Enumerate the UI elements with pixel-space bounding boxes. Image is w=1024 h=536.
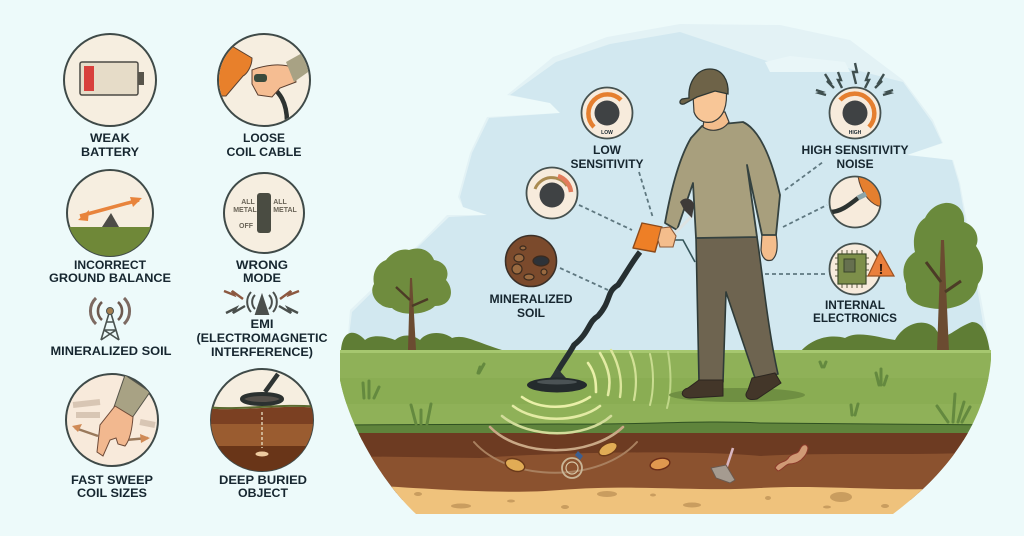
buried objects xyxy=(504,439,808,483)
tree: left xyxy=(341,248,502,350)
ground xyxy=(330,350,1000,520)
callout: internal electronics: ! xyxy=(878,261,884,278)
icon: weak battery: BATTERY xyxy=(81,145,139,159)
icon: wrong mode: WRONG xyxy=(236,258,288,272)
icon: deep buried object: DEEP BURIED xyxy=(219,473,307,487)
icon: tower xyxy=(90,298,130,340)
label: EMI: EMI xyxy=(250,317,274,331)
icon: wrong mode: MODE xyxy=(243,271,281,285)
callout: mineralized soil: MINERALIZED xyxy=(490,292,573,306)
hand on grip xyxy=(658,227,676,247)
icon: ground balance xyxy=(49,170,171,285)
icon: EMI xyxy=(224,291,299,314)
callout: low sensitivity: SENSITIVITY xyxy=(570,157,644,171)
icon: wrong mode: METAL xyxy=(273,207,298,214)
callout: high sensitivity noise: HIGH SENSITIVITY xyxy=(802,143,908,157)
icon: weak battery xyxy=(64,34,156,159)
callout: mineralized soil: SOIL xyxy=(517,306,545,320)
icon: fast sweep: COIL SIZES xyxy=(77,486,147,500)
sky xyxy=(340,24,991,353)
callout: high sensitivity noise: HIGH xyxy=(849,130,862,136)
icon: deep buried object: OBJECT xyxy=(238,486,289,500)
icon: wrong mode: METAL xyxy=(233,207,258,214)
icon: fast sweep: FAST SWEEP xyxy=(71,473,153,487)
coin xyxy=(597,439,619,459)
tree: right xyxy=(800,203,990,352)
callout: internal electronics xyxy=(813,244,897,325)
callout: low sensitivity: LOW xyxy=(593,143,622,157)
shadow xyxy=(669,388,805,402)
callout: low sensitivity xyxy=(570,88,644,171)
ring xyxy=(562,451,583,478)
coin xyxy=(649,457,671,471)
icon: weak battery: WEAK xyxy=(90,131,130,145)
coin xyxy=(504,456,526,474)
icon: wrong mode: ALL xyxy=(273,199,288,206)
callout: internal electronics: ELECTRONICS xyxy=(813,311,897,325)
callout: high sensitivity noise: NOISE xyxy=(836,157,874,171)
armrest xyxy=(668,216,692,240)
label: EMI: INTERFERENCE) xyxy=(211,345,313,359)
icon: loose coil cable xyxy=(214,34,311,159)
callout: mineralized soil xyxy=(490,236,573,320)
icon: deep buried object xyxy=(210,368,314,497)
callout: coil cable plug xyxy=(830,176,885,228)
cap xyxy=(680,69,728,104)
callout: low sensitivity: LOW xyxy=(601,130,613,136)
label: EMI xyxy=(196,317,328,359)
callout: sensitivity knob xyxy=(526,168,578,218)
scrap metal xyxy=(775,445,808,471)
control box xyxy=(633,223,662,252)
callout: high sensitivity noise xyxy=(802,63,908,171)
head xyxy=(693,88,726,122)
dashed connectors xyxy=(560,162,827,290)
label: EMI: (ELECTROMAGNETIC xyxy=(196,331,328,345)
icon: wrong mode xyxy=(224,173,304,285)
icon: fast sweep xyxy=(66,374,158,500)
signal waves xyxy=(474,350,670,473)
grass tufts xyxy=(363,362,970,424)
icon: loose coil cable: COIL CABLE xyxy=(226,145,302,159)
neck xyxy=(703,112,729,130)
icon: wrong mode: OFF xyxy=(239,223,254,230)
icon: ground balance: GROUND BALANCE xyxy=(49,271,171,285)
boot right xyxy=(746,373,781,400)
hand right xyxy=(761,234,777,261)
trousers xyxy=(696,237,778,382)
callout: internal electronics: INTERNAL xyxy=(825,298,885,312)
shaft xyxy=(555,252,640,376)
hammer xyxy=(711,448,735,483)
boot left xyxy=(682,380,723,398)
sweater xyxy=(665,122,780,238)
search coil xyxy=(527,368,587,392)
person xyxy=(527,69,805,402)
noise sparks xyxy=(816,63,893,95)
label: mineralized soil: MINERALIZED SOIL xyxy=(50,344,172,358)
icon: ground balance: INCORRECT xyxy=(74,258,147,272)
icon: loose coil cable: LOOSE xyxy=(243,131,285,145)
icon: wrong mode: ALL xyxy=(241,199,256,206)
